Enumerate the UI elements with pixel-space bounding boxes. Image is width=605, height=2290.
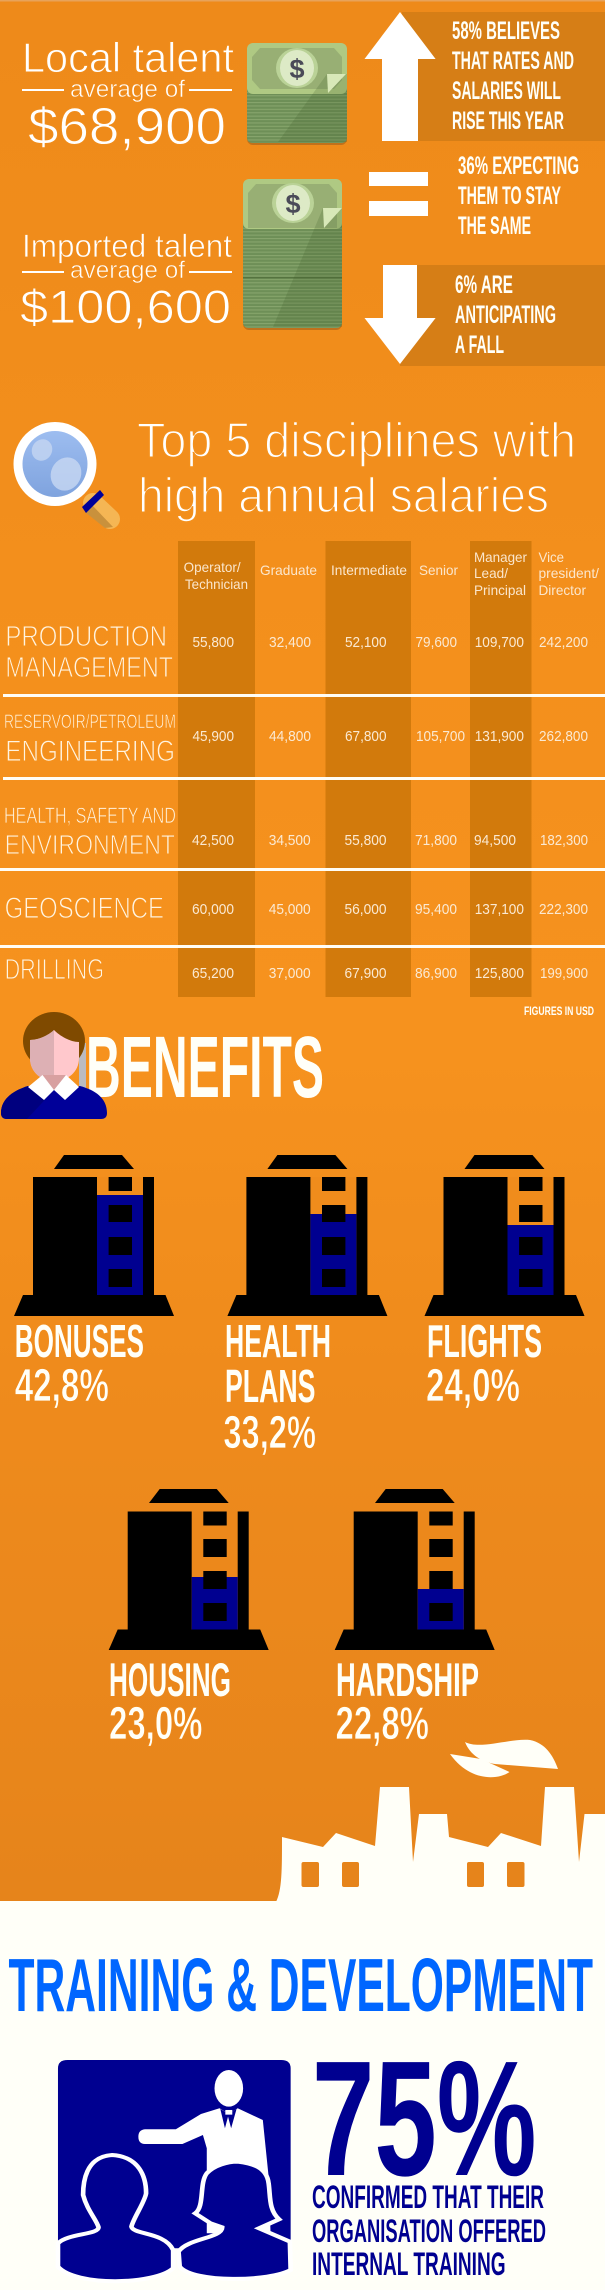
- panel: salary averages: [20, 34, 347, 333]
- row: health, safety and environment: 94,500: [474, 832, 516, 849]
- local talent text: $68,900: [28, 98, 226, 156]
- benefit: flights: [424, 1155, 584, 1411]
- icon: building bonuses: [14, 1155, 174, 1316]
- heading: benefits: BENEFITS: [86, 1019, 324, 1116]
- row: production management: 242,200: [539, 634, 588, 651]
- benefit: health plans: HEALTH: [225, 1315, 331, 1367]
- local talent text: average of: [70, 76, 185, 103]
- icon: money stack large: [243, 179, 342, 330]
- row: drilling: [5, 954, 588, 986]
- table row dividers: [0, 694, 605, 948]
- text: 6% anticipating: 6% ARE: [455, 271, 513, 299]
- arrow: down: [364, 265, 436, 364]
- row: production management: PRODUCTION: [5, 621, 167, 653]
- row: reservoir/petroleum engineering: RESERVOIR/PETROLEUM: [4, 712, 176, 733]
- row: reservoir/petroleum engineering: 44,800: [269, 728, 311, 745]
- heading: top 5 disciplines: high annual salaries: [138, 469, 549, 523]
- table: salaries by discipline: [0, 541, 605, 1018]
- benefit: hardship: [335, 1489, 495, 1749]
- table column headers: president/: [538, 565, 599, 581]
- icon: factory silhouette: [276, 1740, 605, 1902]
- row: geoscience: 60,000: [192, 901, 234, 918]
- icon: money stack small: $: [289, 54, 305, 84]
- table column shading: [178, 541, 532, 997]
- stat: 75 percent: [312, 2027, 546, 2282]
- row: geoscience: 56,000: [344, 901, 386, 918]
- row: health, safety and environment: [4, 803, 588, 860]
- row: health, safety and environment: HEALTH, SAFETY AND: [4, 803, 176, 828]
- row: geoscience: 222,300: [539, 901, 588, 918]
- benefit: hardship: 22,8%: [336, 1697, 429, 1749]
- benefit: flights: 24,0%: [426, 1359, 520, 1411]
- icon: person: [1, 1012, 107, 1119]
- row: health, safety and environment: 42,500: [192, 832, 234, 849]
- text: 6% anticipating: A FALL: [455, 331, 504, 359]
- benefit: housing: 23,0%: [109, 1697, 202, 1749]
- table column headers: Manager: [474, 549, 527, 565]
- row: health, safety and environment: 55,800: [344, 832, 386, 849]
- row: drilling: 125,800: [475, 965, 524, 982]
- table column headers: Lead/: [474, 565, 508, 581]
- row: drilling: 67,900: [344, 965, 386, 982]
- row: production management: MANAGEMENT: [5, 652, 173, 684]
- row: geoscience: 137,100: [475, 901, 524, 918]
- row: geoscience: [5, 892, 588, 925]
- row: reservoir/petroleum engineering: 131,900: [475, 728, 524, 745]
- row: health, safety and environment: ENVIRONMENT: [5, 829, 175, 860]
- table column headers: Operator/: [184, 559, 241, 575]
- row: production management: 79,600: [416, 634, 457, 651]
- text: 36% expecting: [458, 152, 579, 240]
- icon: presenter and audience: [58, 2060, 291, 2281]
- table column headers: Vice: [538, 549, 564, 565]
- row: production management: 52,100: [345, 634, 386, 651]
- row: reservoir/petroleum engineering: 262,800: [539, 728, 588, 745]
- table column headers: Director: [538, 582, 586, 598]
- icon: building hardship: [335, 1489, 495, 1650]
- row: reservoir/petroleum engineering: 45,900: [192, 728, 234, 745]
- benefit: housing: [109, 1489, 269, 1749]
- benefit: health plans: 33,2%: [223, 1406, 316, 1458]
- panel: rate expectations: [364, 12, 605, 366]
- row: reservoir/petroleum engineering: ENGINEERING: [5, 735, 175, 768]
- arrow: up: [364, 12, 436, 141]
- benefit: bonuses: BONUSES: [15, 1315, 144, 1367]
- band: rise: [402, 12, 605, 141]
- row: production management: 55,800: [192, 634, 234, 651]
- row: drilling: 86,900: [415, 965, 457, 982]
- row: drilling: 37,000: [269, 965, 311, 982]
- heading: top 5 disciplines: Top 5 disciplines with: [137, 414, 576, 468]
- row: reservoir/petroleum engineering: 105,700: [416, 728, 465, 745]
- row: production management: [5, 621, 588, 684]
- benefit: bonuses: [14, 1155, 174, 1411]
- row: production management: 32,400: [269, 634, 311, 651]
- icon: building flights: [424, 1155, 584, 1316]
- row: health, safety and environment: 71,800: [415, 832, 457, 849]
- benefit: housing: HOUSING: [109, 1654, 231, 1707]
- row: drilling: 65,200: [192, 965, 234, 982]
- row: health, safety and environment: 34,500: [269, 832, 311, 849]
- text: confirmed internal training: [312, 2179, 546, 2282]
- heading: top 5 disciplines: [137, 414, 576, 523]
- table column headers: Graduate: [260, 562, 317, 578]
- local talent text: Local talent: [22, 34, 234, 81]
- icon: building health plans: [227, 1155, 387, 1316]
- row: drilling: 199,900: [540, 965, 588, 982]
- row: geoscience: 45,000: [269, 901, 311, 918]
- imported talent text: [20, 228, 232, 333]
- row: production management: 109,700: [475, 634, 524, 651]
- icon: building housing: [109, 1489, 269, 1650]
- row: drilling: DRILLING: [5, 954, 104, 986]
- table column headers: Principal: [474, 582, 526, 598]
- icon: money stack small: [247, 43, 347, 145]
- row: geoscience: 95,400: [415, 901, 457, 918]
- row: reservoir/petroleum engineering: [4, 712, 588, 768]
- row: reservoir/petroleum engineering: 67,800: [345, 728, 386, 745]
- table column headers: Senior: [419, 562, 458, 578]
- icon: money stack large: $: [285, 189, 301, 219]
- table column headers: [184, 549, 599, 598]
- table column headers: Intermediate: [331, 562, 407, 578]
- row: geoscience: GEOSCIENCE: [5, 892, 164, 925]
- benefit: hardship: HARDSHIP: [336, 1654, 479, 1707]
- icon: equals: [369, 172, 428, 216]
- benefit: health plans: [223, 1155, 387, 1458]
- imported talent text: $100,600: [20, 280, 231, 333]
- text: 58% believes: [452, 17, 574, 135]
- band: fall: [400, 265, 605, 366]
- imported talent text: Imported talent: [22, 228, 232, 264]
- icon: magnifying glass: [14, 422, 113, 528]
- local talent text: [22, 34, 234, 156]
- text: 6% anticipating: [455, 271, 556, 359]
- imported talent text: average of: [70, 257, 185, 284]
- benefit: bonuses: 42,8%: [15, 1359, 109, 1411]
- benefit: health plans: PLANS: [225, 1360, 315, 1412]
- panel: benefits grid: [14, 1155, 584, 1749]
- text: 36% expecting: THE SAME: [458, 212, 531, 240]
- row: health, safety and environment: 182,300: [540, 832, 588, 849]
- table column headers: Technician: [185, 576, 248, 592]
